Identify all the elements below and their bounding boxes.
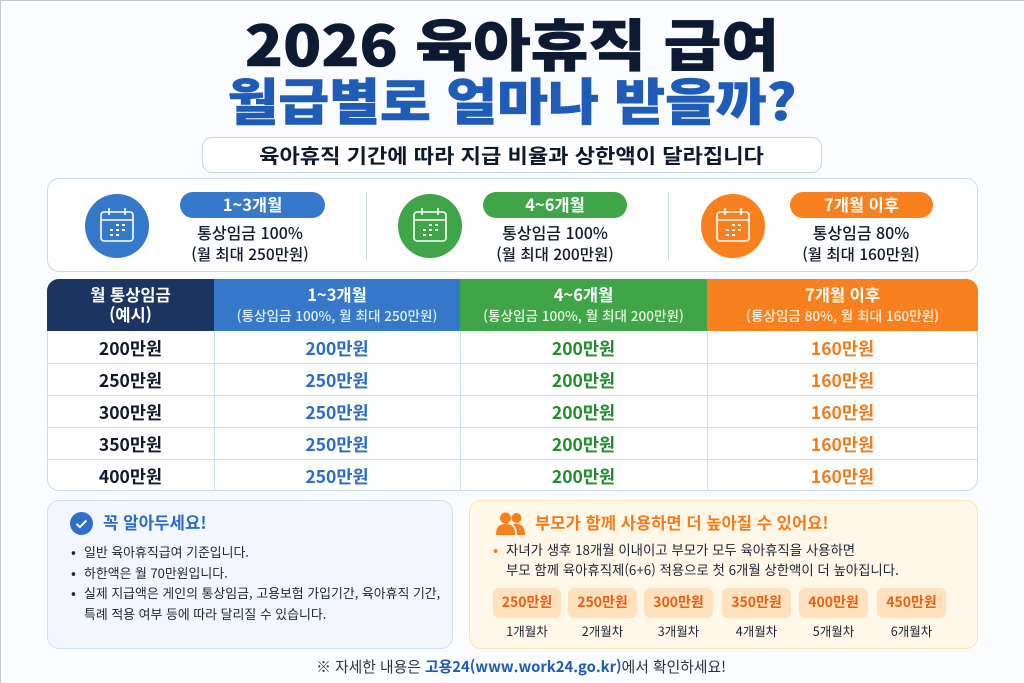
- header: 1~3 months: [214, 279, 460, 331]
- header: after 7 months: [707, 279, 978, 331]
- icon: blue calendar: [85, 194, 149, 258]
- row 250: 250만원: [305, 368, 369, 393]
- footer note: ※ 자세한 내용은 고용24(www.work24.go.kr)에서 확인하세요!: [316, 656, 726, 677]
- month 6: [877, 588, 946, 640]
- month 5: 5개월차: [813, 621, 854, 640]
- header: 4~6 months: (통상임금 100%, 월 최대 200만원): [483, 305, 684, 325]
- pill: 4~6개월: 4~6개월: [525, 192, 585, 216]
- pill: 4~6개월: [483, 192, 627, 218]
- rate text 2: 통상임금 100%: [502, 220, 608, 244]
- title line 1: 2026 육아휴직 급여: [245, 2, 779, 83]
- divider 1: [366, 192, 367, 260]
- row 350: 250만원: [305, 432, 369, 457]
- header: after 7 months: (통상임금 80%, 월 최대 160만원): [746, 305, 939, 325]
- rate text 3: [802, 220, 920, 265]
- header: 1~3 months: (통상임금 100%, 월 최대 250만원): [237, 305, 437, 325]
- notes list: 일반 육아휴직급여 기준입니다.: [84, 542, 249, 561]
- rate text 2: (월 최대 200만원): [496, 243, 614, 265]
- header: salary: (예시): [109, 302, 152, 326]
- panel: notes: [47, 500, 453, 649]
- notes list: •: [71, 542, 76, 561]
- row 200: 200만원: [305, 336, 369, 361]
- pill: 7개월 이후: [790, 192, 933, 218]
- month 2: 250만원: [577, 592, 628, 612]
- title line 2: 월급별로 얼마나 받을까?: [228, 63, 796, 135]
- icon: two people: [496, 512, 525, 535]
- header: 1~3 months: 1~3개월: [307, 282, 367, 306]
- header: after 7 months: 7개월 이후: [805, 282, 880, 306]
- notes list: •: [71, 563, 76, 582]
- panel: parents together: •: [493, 539, 498, 559]
- row 250: [99, 368, 874, 393]
- notes list: 실제 지급액은 게인의 통상임금, 고용보험 가입기간, 육아휴직 기간,: [84, 583, 440, 602]
- month 3: [644, 588, 713, 640]
- pill: 1~3개월: 1~3개월: [223, 192, 282, 216]
- month 1: 250만원: [502, 592, 552, 612]
- notes list: 하한액은 월 70만원입니다.: [84, 563, 228, 582]
- parents description: 자녀가 생후 18개월 이내이고 부모가 모두 육아휴직을 사용하면: [506, 539, 855, 559]
- row 300: 300만원: [99, 400, 162, 425]
- row 350: 200만원: [552, 432, 615, 457]
- header: salary: [47, 279, 214, 331]
- row 400: 250만원: [305, 464, 369, 489]
- icon: check badge: [70, 512, 93, 535]
- row 200: [99, 336, 874, 361]
- row 250: 250만원: [99, 368, 162, 393]
- row 250: 160만원: [811, 368, 874, 393]
- rate text 3: 통상임금 80%: [813, 220, 909, 244]
- row 250: 200만원: [552, 368, 615, 393]
- row 400: 400만원: [99, 464, 162, 489]
- month 5: 400만원: [808, 592, 859, 612]
- month 1: [493, 588, 561, 640]
- row 300: [99, 400, 874, 425]
- header: 4~6 months: 4~6개월: [554, 282, 613, 306]
- pill: 7개월 이후: 7개월 이후: [824, 192, 899, 216]
- header: salary: 월 통상임금: [90, 282, 171, 306]
- month 3: 300만원: [653, 592, 704, 612]
- month 2: [568, 588, 637, 640]
- row 400: [99, 464, 874, 489]
- row 350: 160만원: [811, 432, 874, 457]
- rate text 3: (월 최대 160만원): [802, 243, 920, 265]
- divider 2: [668, 192, 669, 260]
- row lines: [48, 331, 977, 490]
- notes heading: 꼭 알아두세요!: [103, 510, 207, 534]
- parents description: 부모 함께 육아휴직제(6+6) 적용으로 첫 6개월 상한액이 더 높아집니다.: [506, 558, 899, 578]
- month 2: 2개월차: [582, 621, 623, 640]
- icon: orange calendar: [701, 194, 765, 258]
- row 300: 160만원: [811, 400, 874, 425]
- month 6: 450만원: [886, 592, 937, 612]
- subtitle text: 육아휴직 기간에 따라 지급 비율과 상한액이 달라집니다: [259, 140, 764, 169]
- panel: salary table: [47, 279, 978, 491]
- month 4: 350만원: [731, 592, 782, 612]
- rate text 1: [191, 220, 309, 265]
- row 200: 200만원: [552, 336, 615, 361]
- subtitle box: [202, 137, 822, 173]
- month 6: 6개월차: [891, 621, 932, 640]
- panel: period summary: [47, 178, 978, 272]
- notes list: [71, 542, 440, 623]
- panel: parents together: [469, 500, 978, 649]
- row 200: 160만원: [811, 336, 874, 361]
- pill: 1~3개월: [180, 192, 325, 218]
- row 300: 250만원: [305, 400, 369, 425]
- parents description: [493, 539, 899, 578]
- row 400: 160만원: [811, 464, 874, 489]
- month 1: 1개월차: [506, 621, 548, 640]
- row 200: 200만원: [99, 336, 162, 361]
- month 5: [799, 588, 868, 640]
- rate text 1: (월 최대 250만원): [191, 243, 309, 265]
- rate text 2: [496, 220, 614, 265]
- month 4: 4개월차: [736, 621, 777, 640]
- icon: green calendar: [398, 194, 462, 258]
- month 3: 3개월차: [658, 621, 699, 640]
- month 4: [722, 588, 791, 640]
- parents heading: 부모가 함께 사용하면 더 높아질 수 있어요!: [535, 510, 829, 534]
- notes list: 특례 적용 여부 등에 따라 달리질 수 있습니다.: [84, 604, 326, 623]
- row 400: 200만원: [552, 464, 615, 489]
- row 300: 200만원: [552, 400, 615, 425]
- row 350: [99, 432, 874, 457]
- notes list: •: [71, 583, 76, 602]
- row 350: 350만원: [99, 432, 162, 457]
- rate text 1: 통상임금 100%: [197, 220, 303, 244]
- header: 4~6 months: [460, 279, 707, 331]
